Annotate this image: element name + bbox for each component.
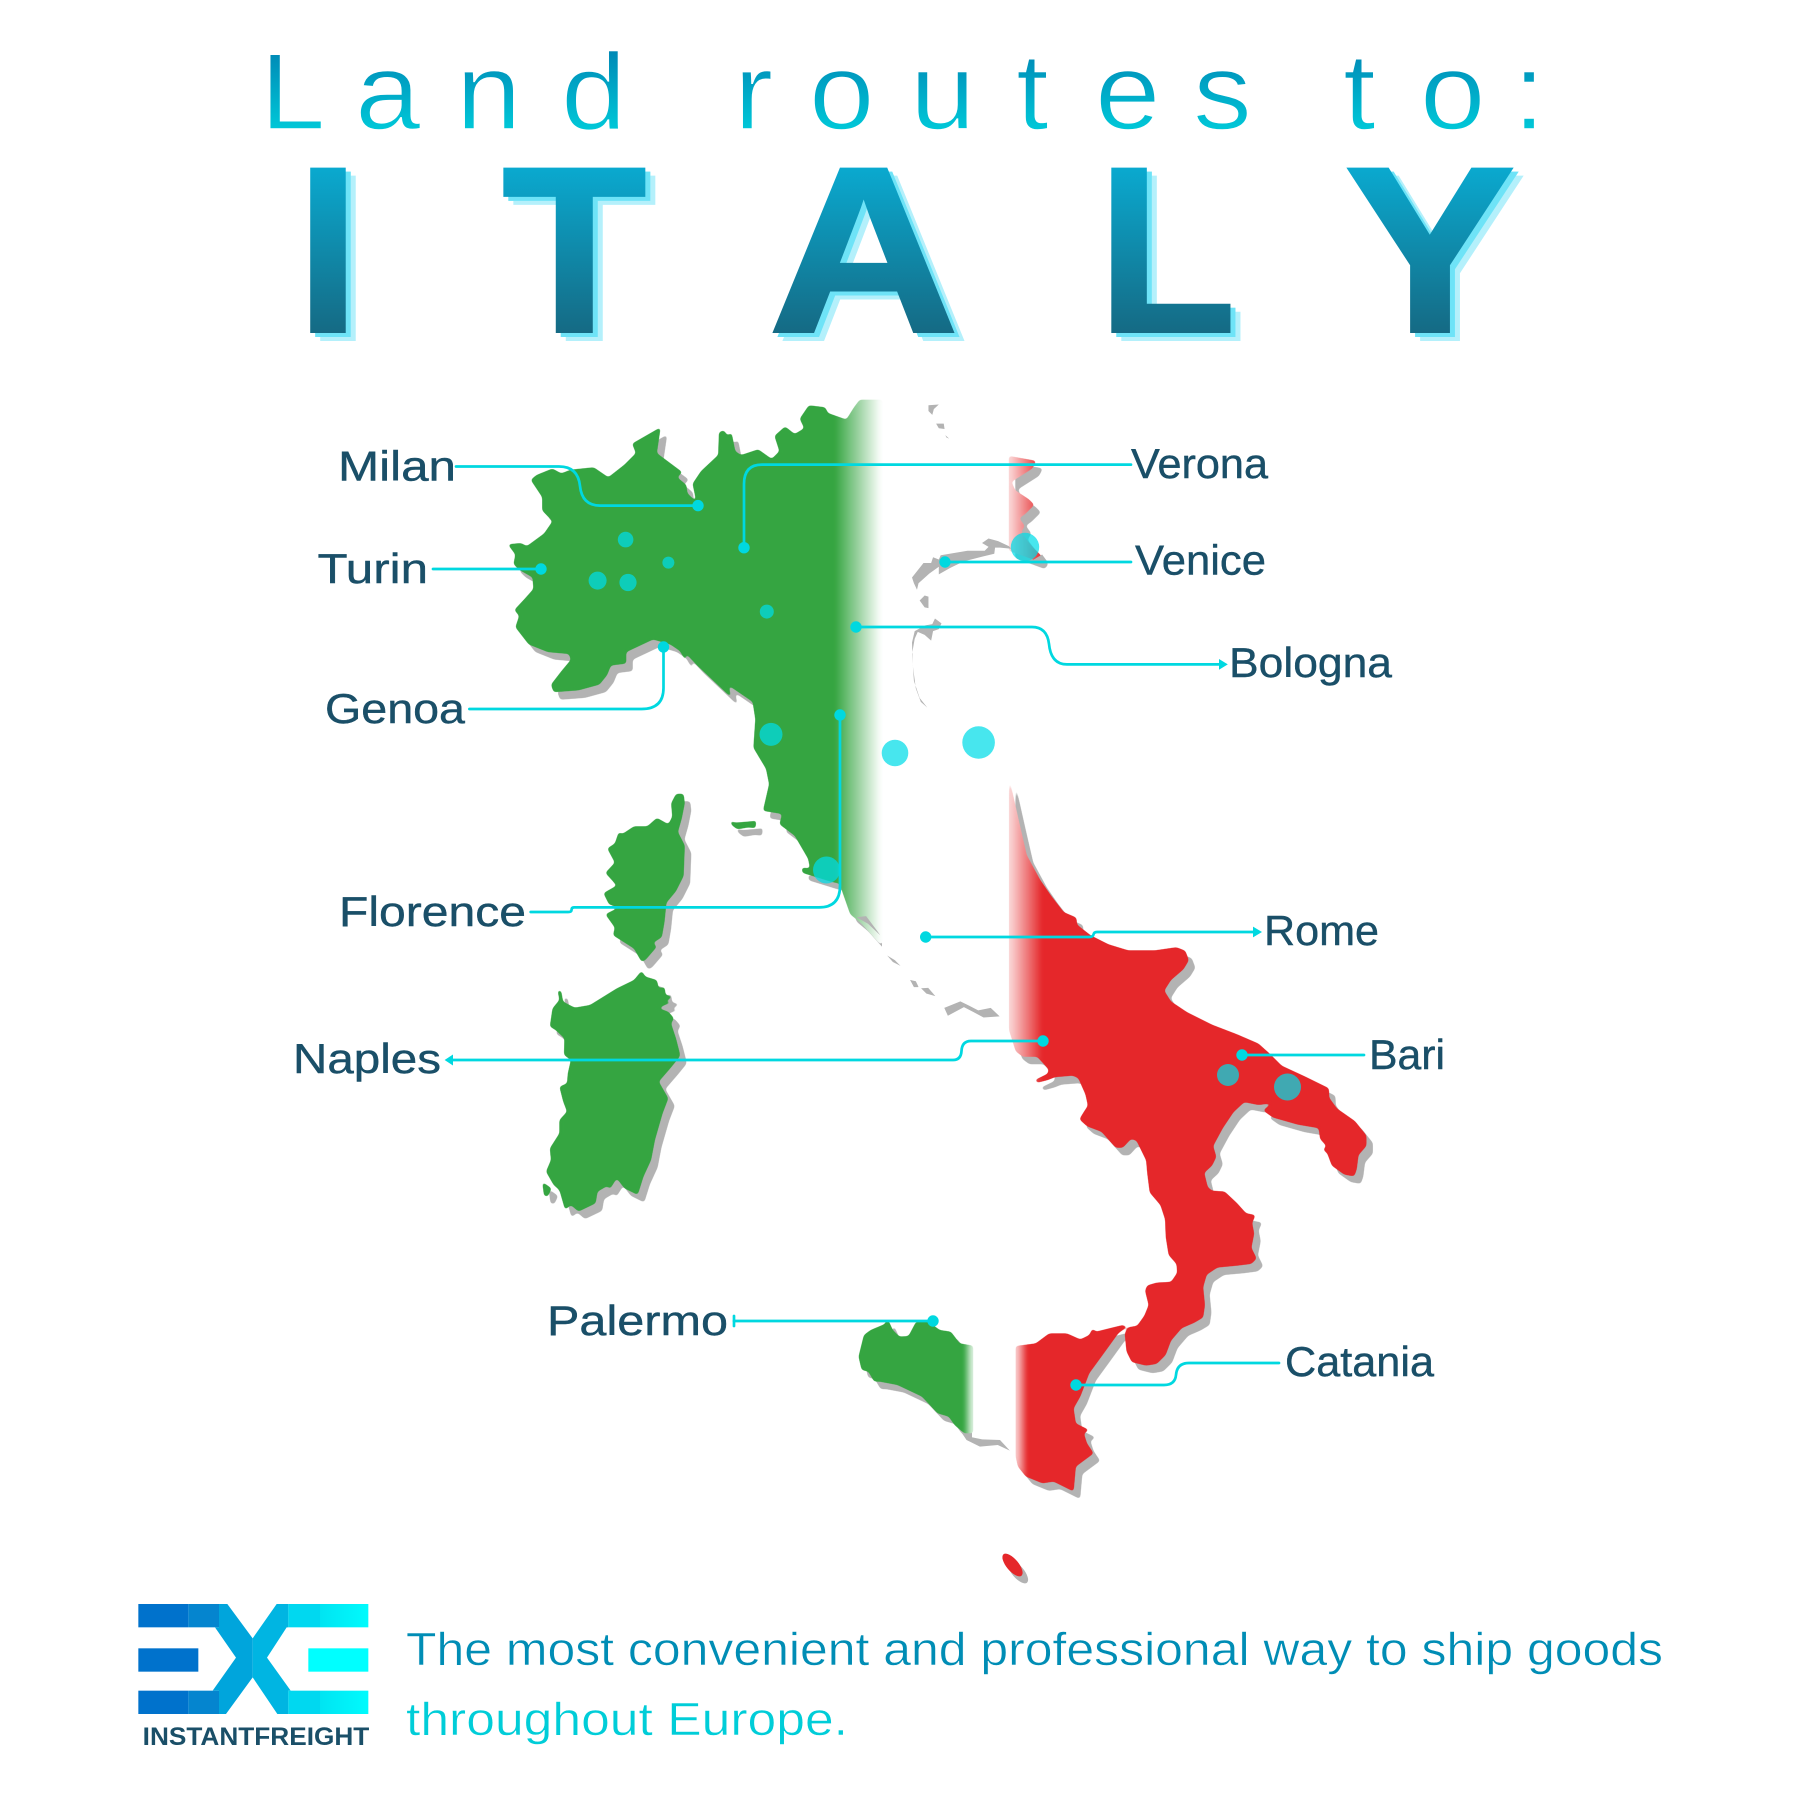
label: Florence: [339, 709, 846, 935]
label: Verona: Verona: [1131, 440, 1269, 487]
map land fills: [508, 400, 1366, 1492]
label: Florence: Florence: [339, 888, 526, 935]
Sicily: grey south coast in white band: [960, 1430, 1010, 1451]
label: Genoa: Genoa: [325, 685, 466, 732]
logo wordmark: INSTANTFREIGHT: [143, 1723, 369, 1751]
island: Malta: [999, 1550, 1026, 1580]
label: Catania: [1070, 1338, 1435, 1391]
label: Verona: [738, 440, 1269, 553]
label: Milan: Milan: [338, 442, 456, 489]
mainland: red north-east sliver: [1009, 456, 1042, 561]
label: Palermo: [547, 1297, 939, 1344]
map of Italy: [508, 400, 1373, 1587]
mainland: green north: [508, 400, 883, 945]
title: ITALY: T: [502, 118, 646, 382]
label: Bologna: [850, 621, 1393, 686]
label: Catania: Catania: [1285, 1338, 1435, 1385]
label: Naples: [293, 1035, 1049, 1082]
islet off Sardinia: [542, 1182, 552, 1197]
label: Turin: Turin: [318, 545, 428, 592]
Sicily: red east: [1016, 1325, 1127, 1492]
logo mark: [138, 1604, 368, 1714]
map drop shadows: [514, 407, 1373, 1499]
label: Rome: Rome: [1264, 907, 1379, 954]
label: Milan: [338, 442, 704, 511]
mainland: red south: [1009, 776, 1366, 1366]
label: Venice: Venice: [1135, 536, 1266, 584]
island: Elba: [730, 819, 756, 829]
label: Bari: [1236, 1031, 1445, 1078]
label: Venice: [939, 536, 1266, 584]
title: ITALY: [296, 118, 1515, 383]
tagline: [406, 1623, 1663, 1745]
tagline second line: throughout Europe.: [406, 1693, 848, 1745]
decorative translucent city circles: [589, 532, 1301, 1100]
label: Genoa: [325, 641, 669, 732]
label: Bologna: Bologna: [1229, 639, 1393, 686]
title: ITALY: I: [296, 119, 359, 383]
island: Malta shadow: [1004, 1557, 1032, 1587]
logo: InstantFreight: [138, 1604, 369, 1751]
title: Land routes to: Land routes to:: [260, 31, 1545, 153]
Sicily: green west: [858, 1318, 973, 1433]
label: Rome: [920, 907, 1379, 954]
title: ITALY: A: [768, 119, 959, 382]
title: ITALY: L: [1098, 119, 1236, 383]
label: Bari: Bari: [1369, 1031, 1445, 1078]
island: Corsica: [603, 794, 685, 962]
label: Turin: [318, 545, 547, 592]
grey coastline slivers west of Naples: [910, 980, 1000, 1017]
grey coastline slivers in white band: [857, 405, 1048, 987]
tagline first line: The most convenient and professional way to ship goods: [406, 1623, 1663, 1675]
label: Palermo: Palermo: [547, 1297, 728, 1344]
title: ITALY: Y: [1345, 119, 1515, 382]
island: Sardinia: [546, 971, 680, 1212]
label: Naples: Naples: [293, 1035, 441, 1082]
